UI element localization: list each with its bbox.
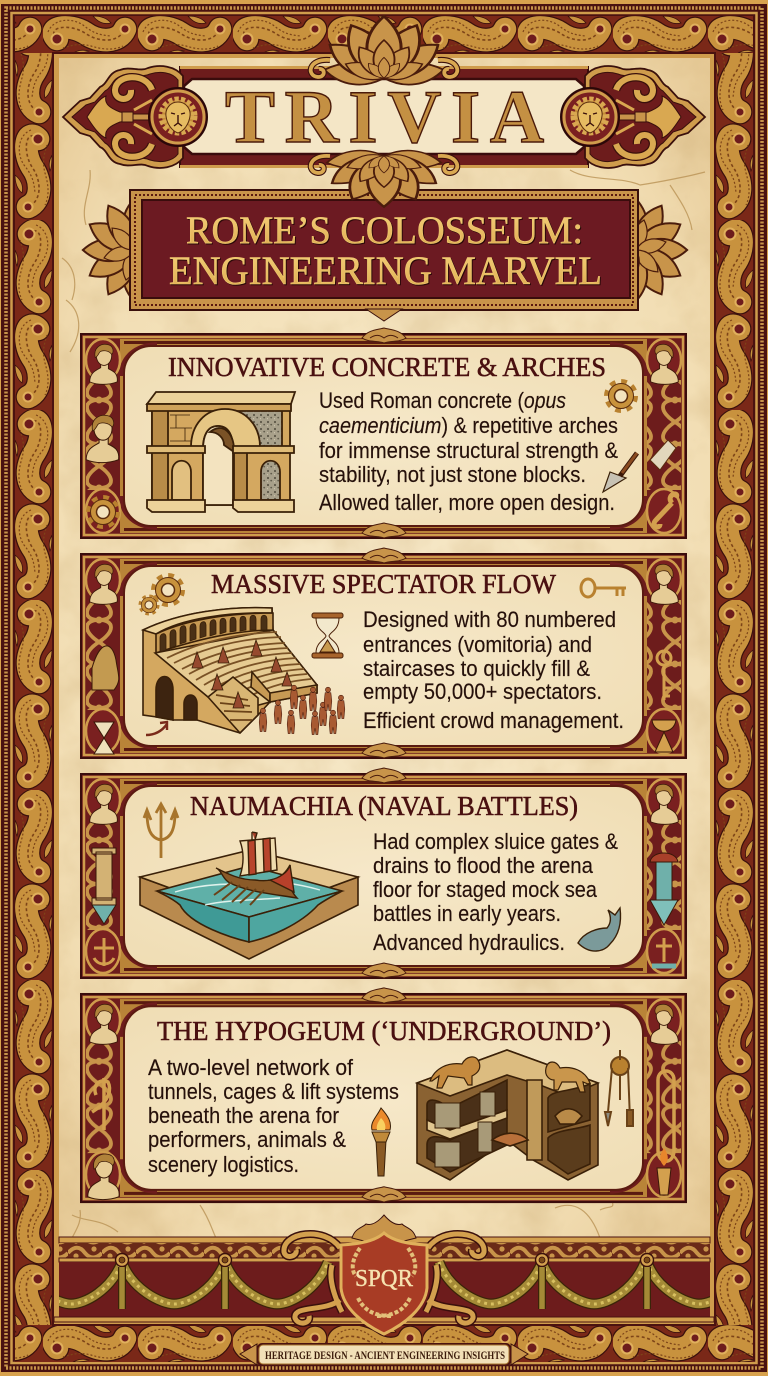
icon: pulley and ropes [605, 1050, 633, 1126]
body text: Allowed taller, more open design. [319, 490, 615, 515]
body text [319, 388, 618, 515]
left lion ornament [63, 66, 207, 168]
illustration: arch with concrete core [147, 392, 295, 512]
subtitle line 1: ROME’S COLOSSEUM: [186, 209, 583, 252]
heading: MASSIVE SPECTATOR FLOW [211, 569, 556, 599]
side ornaments [86, 344, 678, 527]
floral frieze [59, 1243, 710, 1258]
parchment panel [59, 58, 710, 1238]
bottom tip [366, 309, 402, 321]
dotted plaque inset [135, 195, 633, 305]
panel frame [81, 548, 686, 758]
maroon band [59, 1262, 710, 1317]
body text: Used Roman concrete (opus [319, 388, 566, 413]
panel: naumachia naval battles [81, 768, 686, 978]
footer band [19, 1215, 750, 1366]
icon: torch [372, 1108, 391, 1176]
side ornaments [90, 564, 678, 754]
body text: A two-level network of [148, 1055, 354, 1080]
footer pill [240, 1343, 528, 1366]
plate interior [184, 79, 584, 154]
right lion ornament [561, 66, 705, 168]
panel frame [81, 768, 686, 978]
right rosette [585, 199, 687, 301]
icon: hourglass [312, 613, 343, 658]
body text: Designed with 80 numbered [363, 607, 616, 632]
flower crest below the title [311, 148, 457, 207]
subtitle plaque [83, 190, 687, 321]
maroon plaque field [142, 200, 630, 298]
illustration: flooded arena block [140, 850, 358, 959]
icon: trident [144, 804, 178, 858]
crown of shield [352, 1215, 416, 1246]
subtitle line 2: ENGINEERING MARVEL [169, 248, 602, 293]
crowd of spectators [259, 685, 345, 735]
side ornaments [88, 1004, 678, 1200]
SPQR: SPQR [355, 1266, 413, 1292]
body text: drains to flood the arena [373, 853, 594, 878]
body text: empty 50,000+ spectators. [363, 679, 602, 704]
illustration: Roman galley [214, 832, 297, 905]
panel: innovative concrete and arches [81, 328, 686, 538]
body text: scenery logistics. [148, 1152, 299, 1177]
illustration: amphitheatre cutaway [143, 608, 317, 733]
body text: tunnels, cages & lift systems [148, 1079, 399, 1104]
body text: performers, animals & [148, 1127, 346, 1152]
side ornaments [90, 784, 678, 966]
plaque frame [130, 190, 638, 310]
lower gold bar trim [180, 165, 588, 168]
body text: battles in early years. [373, 901, 561, 926]
body text: Efficient crowd management. [363, 708, 624, 733]
maroon banner bars [180, 67, 588, 167]
lion statue left [430, 1057, 480, 1088]
footer credit: HERITAGE DESIGN - ANCIENT ENGINEERING INSIGHTS [265, 1348, 505, 1362]
heading: INNOVATIVE CONCRETE & ARCHES [168, 352, 606, 382]
body text: caementicium) & repetitive arches [319, 413, 618, 438]
body text [363, 607, 624, 733]
icon: key [581, 579, 626, 597]
title: TRIVIA: TRIVIA [225, 76, 544, 159]
icon: trowel [603, 453, 637, 492]
lower gold strip [59, 1258, 710, 1262]
heading: THE HYPOGEUM (‘UNDERGROUND’) [157, 1016, 611, 1046]
body text: for immense structural strength & [319, 438, 618, 463]
shield scrollwork [284, 1234, 484, 1323]
icon: gear [606, 382, 636, 410]
panel frame [81, 328, 686, 538]
laurel garlands right [439, 1254, 750, 1309]
arrow into the entrance [146, 722, 167, 735]
body text [373, 829, 618, 955]
icon: small gear [140, 596, 158, 614]
icon: dolphin [578, 908, 621, 951]
body text: floor for staged mock sea [373, 877, 598, 902]
gold bar trims [180, 66, 588, 69]
body text: staircases to quickly fill & [363, 656, 590, 681]
upper gold strip [59, 1237, 710, 1243]
body text [148, 1055, 399, 1177]
flower crest above the title [311, 16, 457, 88]
laurel wreath [353, 1248, 415, 1316]
body text: entrances (vomitoria) and [363, 632, 592, 657]
body text: Advanced hydraulics. [373, 930, 565, 955]
title banner [63, 16, 705, 207]
panel: the hypogeum [81, 988, 686, 1202]
panel: massive spectator flow [81, 548, 686, 758]
left rosette [83, 199, 185, 301]
shield [341, 1233, 427, 1334]
heading: NAUMACHIA (NAVAL BATTLES) [190, 791, 578, 821]
body text: Had complex sluice gates & [373, 829, 618, 854]
panel frame [81, 988, 686, 1202]
lion statue right [546, 1062, 590, 1092]
laurel garlands left [19, 1254, 328, 1309]
body text: stability, not just stone blocks. [319, 462, 586, 487]
icon: large gear [154, 576, 182, 604]
bottom gold strip [54, 1317, 714, 1322]
body text: beneath the arena for [148, 1103, 339, 1128]
illustration: hypogeum cutaway [417, 1050, 598, 1180]
